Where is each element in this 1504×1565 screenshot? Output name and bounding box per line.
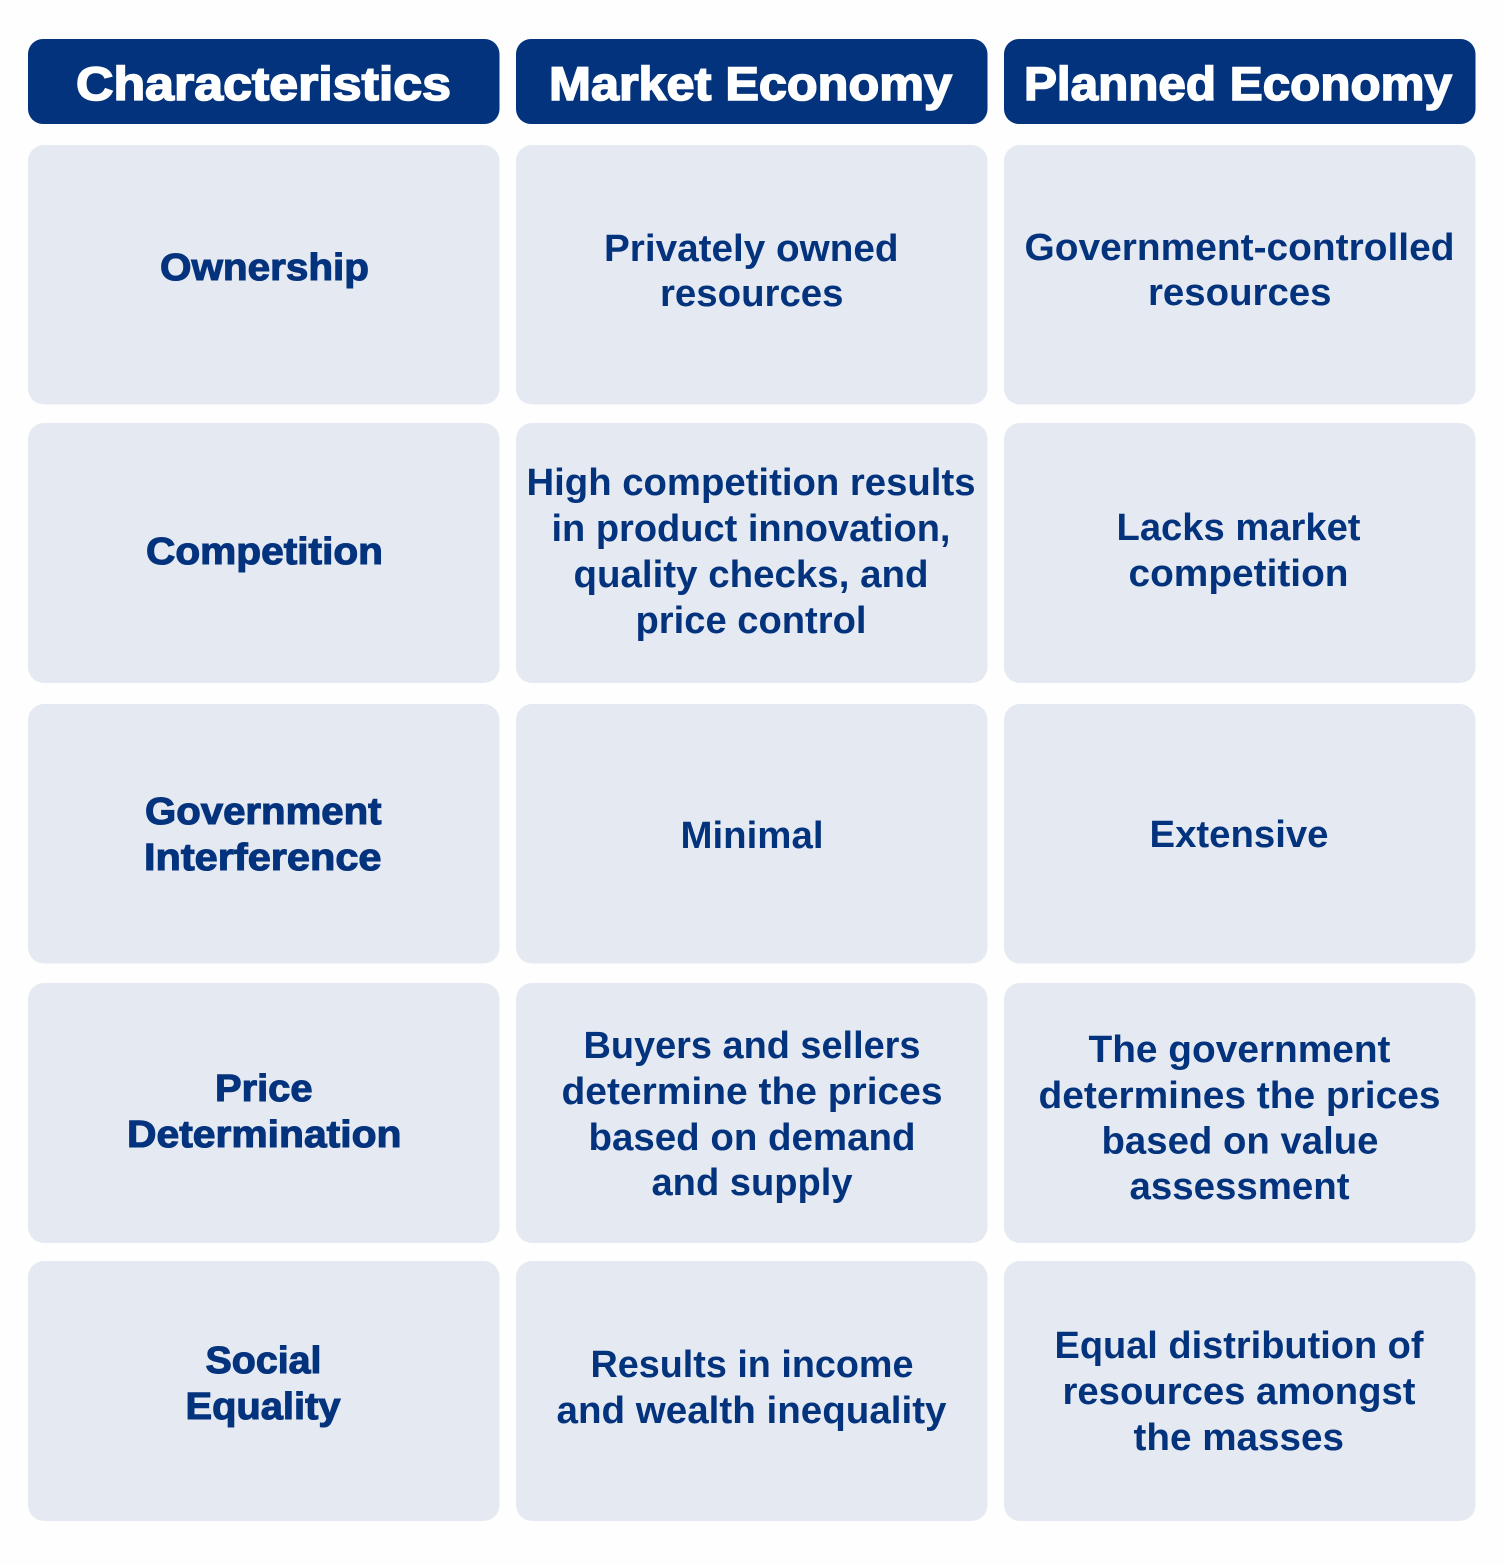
row 4 characteristic: Price Determination: Price bbox=[215, 1068, 312, 1110]
row 2 planned economy bbox=[1004, 423, 1476, 683]
row 5 characteristic: Social Equality bbox=[28, 1261, 500, 1521]
row 2 market economy: in product innovation, bbox=[552, 508, 950, 550]
row 4 market economy: based on demand bbox=[588, 1117, 916, 1159]
row 2 market economy bbox=[516, 423, 988, 683]
row 2 market economy: High competition results bbox=[526, 462, 976, 504]
header: Planned Economy bbox=[1004, 39, 1476, 124]
row 3 characteristic: Government Interference: Government bbox=[145, 791, 382, 833]
row 4 characteristic: Price Determination: Determination bbox=[127, 1114, 402, 1156]
row 1 planned economy: resources bbox=[1148, 272, 1332, 314]
row 4 planned economy bbox=[1004, 983, 1476, 1243]
row 3 characteristic: Government Interference bbox=[28, 704, 500, 964]
row 4 market economy bbox=[516, 983, 988, 1243]
row 5 planned economy bbox=[1004, 1261, 1476, 1521]
row 1 characteristic: Ownership bbox=[28, 145, 500, 404]
row 1 market economy: Privately owned bbox=[604, 228, 898, 270]
row 3 planned economy: Extensive bbox=[1150, 814, 1328, 856]
row 3 market economy bbox=[516, 704, 988, 964]
row 1 planned economy: Government-controlled bbox=[1024, 227, 1454, 269]
row 2 characteristic: Competition: Competition bbox=[146, 531, 383, 573]
row 2 market economy: price control bbox=[636, 600, 866, 642]
row 5 planned economy: Equal distribution of bbox=[1054, 1325, 1424, 1367]
header: Characteristics: Characteristics bbox=[76, 57, 451, 110]
row 3 characteristic: Government Interference: Interference bbox=[144, 837, 382, 879]
row 5 planned economy: the masses bbox=[1134, 1417, 1344, 1459]
row 2 planned economy: Lacks market bbox=[1116, 507, 1361, 549]
row 1 market economy: resources bbox=[660, 273, 844, 315]
row 3 market economy: Minimal bbox=[680, 815, 824, 857]
row 5 market economy: and wealth inequality bbox=[556, 1390, 946, 1432]
row 5 characteristic: Social Equality: Equality bbox=[186, 1386, 340, 1428]
row 4 planned economy: assessment bbox=[1130, 1166, 1350, 1208]
row 4 planned economy: based on value bbox=[1102, 1121, 1378, 1163]
row 3 planned economy bbox=[1004, 704, 1476, 964]
row 1 characteristic: Ownership: Ownership bbox=[160, 247, 369, 289]
header: Market Economy: Market Economy bbox=[549, 57, 952, 110]
row 1 planned economy bbox=[1004, 145, 1476, 404]
row 1 market economy bbox=[516, 145, 988, 404]
row 4 market economy: determine the prices bbox=[562, 1071, 942, 1113]
row 2 market economy: quality checks, and bbox=[574, 554, 928, 596]
header: Market Economy bbox=[516, 39, 988, 124]
row 5 market economy: Results in income bbox=[590, 1344, 914, 1386]
row 4 planned economy: The government bbox=[1088, 1029, 1391, 1071]
row 4 planned economy: determines the prices bbox=[1038, 1075, 1440, 1117]
header: Characteristics bbox=[28, 39, 500, 124]
row 5 market economy bbox=[516, 1261, 988, 1521]
row 4 market economy: Buyers and sellers bbox=[584, 1025, 920, 1067]
row 5 characteristic: Social Equality: Social bbox=[206, 1340, 322, 1382]
row 5 planned economy: resources amongst bbox=[1062, 1371, 1416, 1413]
header: Planned Economy: Planned Economy bbox=[1024, 57, 1452, 110]
row 4 market economy: and supply bbox=[652, 1162, 852, 1204]
row 4 characteristic: Price Determination bbox=[28, 983, 500, 1243]
row 2 planned economy: competition bbox=[1128, 553, 1348, 595]
row 2 characteristic: Competition bbox=[28, 423, 500, 683]
